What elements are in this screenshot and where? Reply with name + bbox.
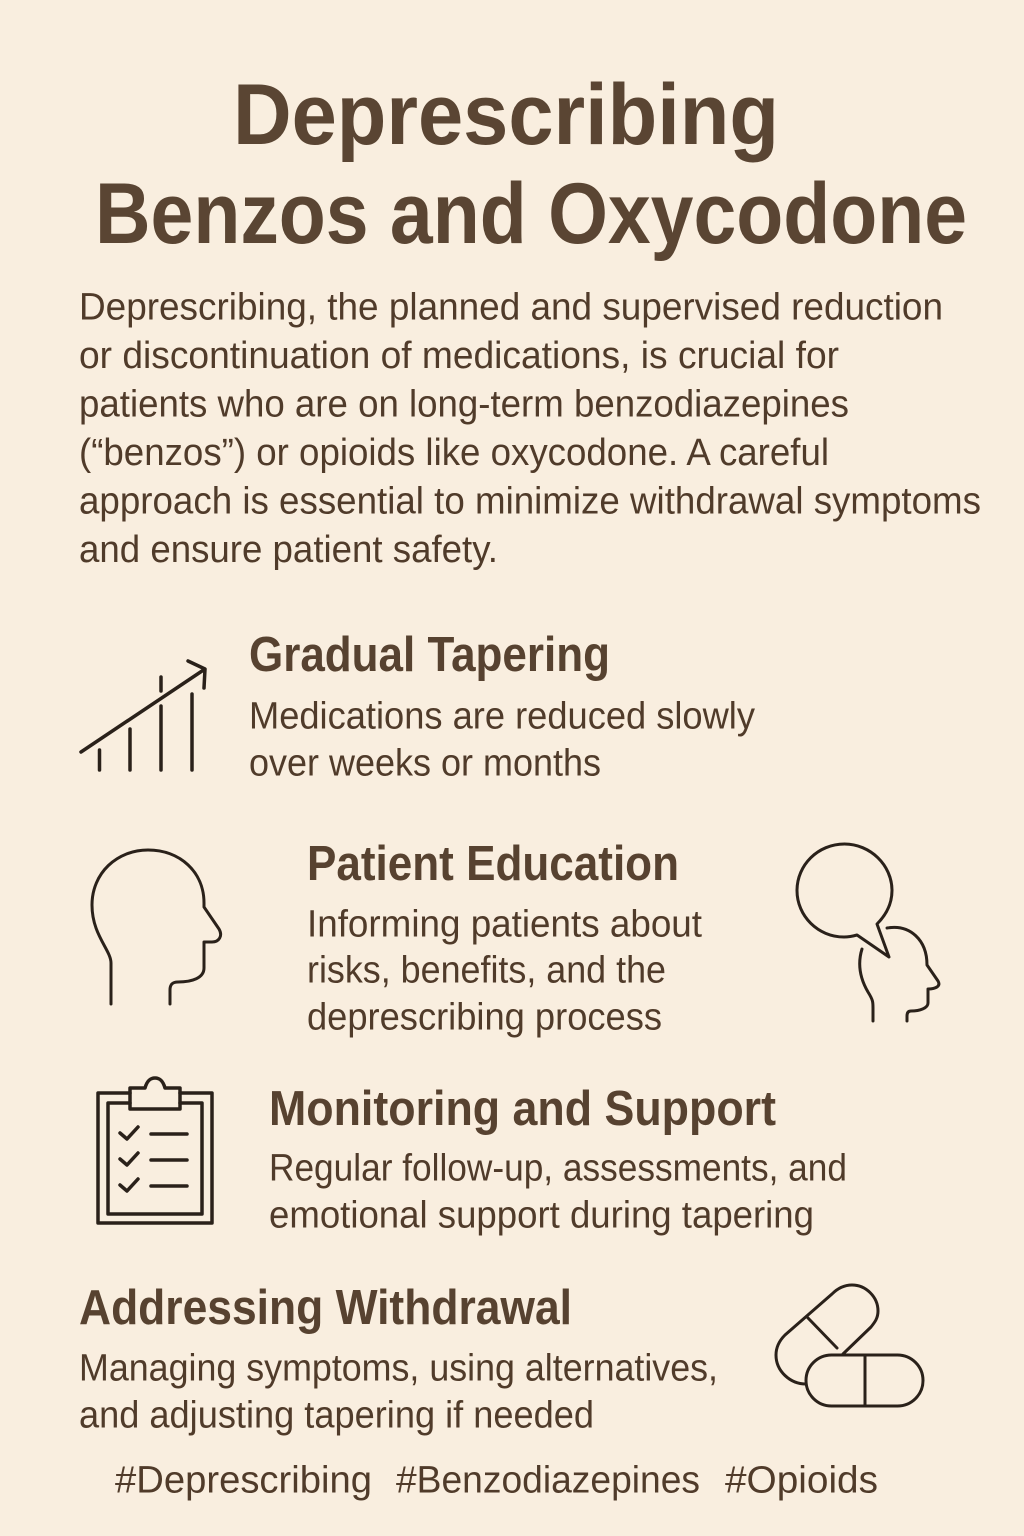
icon: rising chart with arrow <box>81 661 205 770</box>
heading: addressing withdrawal: Addressing Withdrawal <box>79 1281 572 1335</box>
icon: clipboard checklist <box>98 1078 212 1223</box>
heading: patient education: Patient Education <box>307 837 679 891</box>
hashtags: #Opioids <box>725 1460 878 1502</box>
hashtags: #Deprescribing <box>115 1460 372 1502</box>
panel: monitoring and support <box>98 1078 847 1236</box>
heading: gradual tapering: Gradual Tapering <box>249 628 610 682</box>
description: addressing withdrawal: and adjusting tapering if needed <box>79 1394 594 1436</box>
intro paragraph: Deprescribing, the planned and supervised reduction <box>79 286 943 328</box>
description: addressing withdrawal <box>79 1348 718 1436</box>
description: patient education <box>307 904 702 1038</box>
icon: two capsules <box>776 1285 923 1406</box>
description: addressing withdrawal: Managing symptoms, using alternatives, <box>79 1348 718 1390</box>
intro paragraph: patients who are on long-term benzodiazepines <box>79 384 849 426</box>
panel: patient education <box>92 837 939 1038</box>
description: gradual tapering: Medications are reduced slowly <box>249 696 755 738</box>
description: gradual tapering: over weeks or months <box>249 742 601 784</box>
description: patient education: Informing patients about <box>307 904 702 946</box>
icon: speech bubble and head <box>797 844 939 1021</box>
description: monitoring and support: Regular follow-up, assessments, and <box>269 1148 847 1190</box>
description: monitoring and support: emotional support during tapering <box>269 1194 814 1236</box>
intro paragraph <box>79 286 981 571</box>
hashtags <box>115 1460 878 1502</box>
description: patient education: deprescribing process <box>307 996 662 1038</box>
intro paragraph: (“benzos”) or opioids like oxycodone. A careful <box>79 432 829 474</box>
description: gradual tapering <box>249 696 755 784</box>
description: patient education: risks, benefits, and the <box>307 950 666 992</box>
intro paragraph: and ensure patient safety. <box>79 529 498 571</box>
hashtags: #Benzodiazepines <box>396 1460 700 1502</box>
panel: gradual tapering <box>81 628 755 784</box>
title: Deprescribing <box>233 67 779 163</box>
heading: monitoring and support: Monitoring and Support <box>269 1082 776 1136</box>
intro paragraph: approach is essential to minimize withdrawal symptoms <box>79 480 981 522</box>
title <box>95 67 967 262</box>
intro paragraph: or discontinuation of medications, is crucial for <box>79 335 839 377</box>
description: monitoring and support <box>269 1148 847 1236</box>
panel: addressing withdrawal <box>79 1281 923 1436</box>
icon: head profile <box>92 850 221 1004</box>
